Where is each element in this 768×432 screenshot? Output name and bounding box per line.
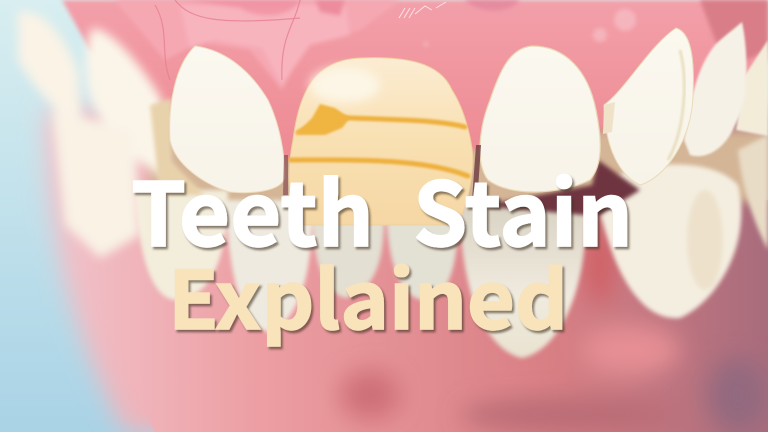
tooth right 2 (684, 22, 746, 156)
title: Teeth Stain (131, 145, 633, 272)
upper gum (62, 0, 768, 160)
lower gum body (85, 200, 768, 432)
small gum markings (399, 2, 446, 18)
title: Teeth Stain: Stain (413, 145, 633, 272)
shadow tooth behind left incisor (150, 98, 205, 195)
title: Explained: Explained (168, 237, 568, 353)
dark shadow under upper teeth (480, 160, 640, 215)
lower tooth 5 (460, 205, 586, 358)
gap shadow (472, 145, 481, 200)
mouth interior (150, 130, 768, 215)
tooth right 1 (604, 28, 693, 185)
left incisor (170, 46, 285, 193)
tooth far right (736, 40, 768, 136)
lower teeth row (135, 135, 768, 358)
lower tooth 6 (596, 164, 741, 318)
stain blob (295, 104, 350, 135)
lower tooth 1 (135, 190, 228, 300)
title: Teeth Stain: Teeth (131, 145, 374, 272)
lower tooth 2 (226, 200, 312, 332)
lighter marbled gum area (115, 0, 768, 90)
lower tooth 3 (312, 200, 384, 298)
far left blurred teeth (18, 12, 168, 258)
stain streaks (291, 117, 468, 176)
gum shading lower right (340, 225, 768, 432)
gum texture lines (155, 0, 300, 80)
tooth center right (480, 46, 600, 192)
lower tooth far right (738, 135, 768, 250)
upper right teeth (170, 22, 768, 225)
gum highlight speckles (424, 9, 636, 46)
stained tooth (289, 58, 473, 225)
lower tooth 4 (386, 200, 458, 300)
lower gum edge blur (45, 110, 768, 432)
